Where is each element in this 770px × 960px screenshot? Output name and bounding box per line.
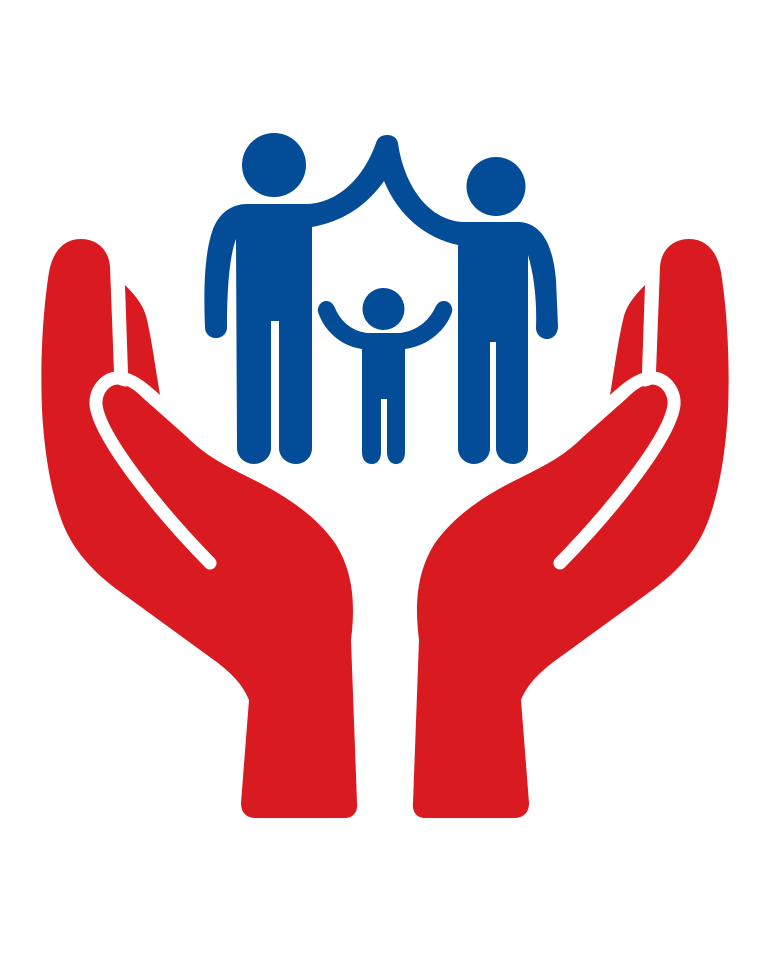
icon: left adult head (242, 133, 306, 197)
icon: child head (362, 288, 404, 330)
icon: two adults with joined arms (204, 135, 558, 464)
icon: right adult head (466, 157, 526, 216)
icon: child body with raised arms (318, 301, 452, 464)
icon: family (204, 133, 558, 464)
icon: right red hand (413, 239, 729, 818)
icon: left red hand (41, 239, 357, 818)
